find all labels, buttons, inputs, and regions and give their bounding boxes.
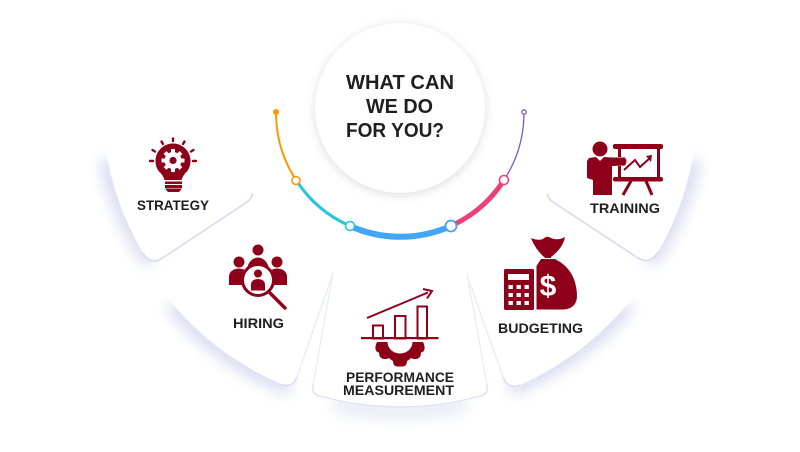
heading: WHAT CAN bbox=[346, 72, 454, 94]
panel: hiring bbox=[160, 240, 333, 385]
heading bbox=[346, 72, 454, 142]
label: strategy: STRATEGY bbox=[137, 197, 210, 213]
icon: money bag and calculator bbox=[504, 237, 577, 310]
panel: budgeting bbox=[467, 237, 640, 386]
label: hiring: HIRING bbox=[233, 315, 284, 331]
icon: presenter with chart board bbox=[587, 142, 663, 195]
label: budgeting: BUDGETING bbox=[498, 320, 583, 336]
heading: WE DO bbox=[366, 96, 433, 118]
center circle bbox=[315, 23, 485, 195]
segmented arc bbox=[273, 109, 526, 237]
label: training: TRAINING bbox=[590, 200, 660, 216]
icon: money bag and calculator: $ bbox=[540, 270, 557, 303]
heading: FOR YOU? bbox=[346, 120, 444, 142]
panel: training bbox=[548, 120, 696, 260]
icon: people under magnifier bbox=[229, 244, 287, 308]
icon: bar chart over gear bbox=[361, 289, 438, 366]
panel shadows bbox=[106, 160, 694, 411]
label: performance: PERFORMANCE bbox=[346, 369, 454, 385]
label: measurement: MEASUREMENT bbox=[343, 382, 454, 398]
icon: light bulb with gear bbox=[150, 138, 196, 192]
panel: performance measurement bbox=[313, 273, 487, 407]
panel: strategy bbox=[104, 125, 252, 261]
